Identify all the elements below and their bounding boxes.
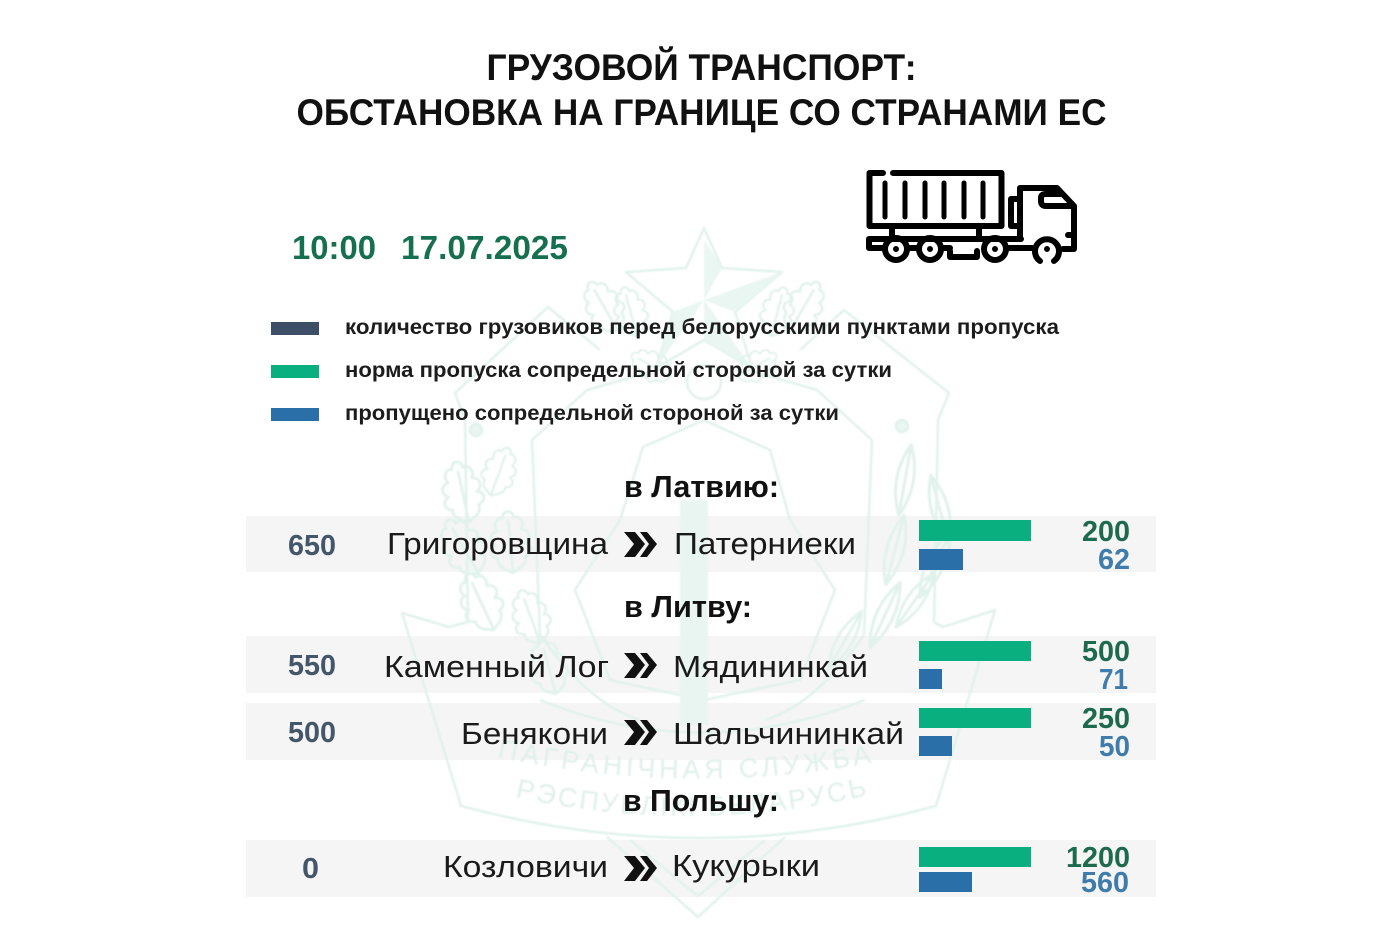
title: ОБСТАНОВКА НА ГРАНИЦЕ СО СТРАНАМИ ЕС <box>296 92 1106 133</box>
row: Grigorovshchina: 650 <box>288 530 336 562</box>
row: Benyakoni: 500 <box>288 717 336 749</box>
heading: Poland: в Польшу: <box>623 783 779 818</box>
watermark: border service emblem <box>400 226 996 918</box>
date and time: 17.07.2025 <box>401 229 568 266</box>
row: Kamenny Log: 550 <box>288 650 336 682</box>
title: ГРУЗОВОЙ ТРАНСПОРТ: <box>486 46 916 88</box>
watermark: border service emblem: РЭСПУБЛІКІ БЕЛАРУСЬ <box>517 779 866 816</box>
date and time <box>292 229 568 266</box>
legend item: daily norm: норма пропуска сопредельной стороной за сутки <box>345 359 892 382</box>
row: Benyakoni: 250 <box>1082 703 1130 735</box>
shield outline <box>402 307 995 838</box>
row: Benyakoni: 50 <box>1099 731 1130 763</box>
row: Grigorovshchina: 62 <box>1098 544 1130 576</box>
row: Kozlovichi: 560 <box>1081 867 1129 899</box>
row: Benyakoni <box>288 703 1130 763</box>
row: Kamenny Log: Мядининкай <box>673 649 868 684</box>
heading: Latvia: в Латвию: <box>624 469 779 504</box>
legend item: passed per day: пропущено сопредельной стороной за сутки <box>345 402 839 425</box>
row: Kozlovichi: Козловичи <box>443 849 608 884</box>
heading: Lithuania: в Литву: <box>624 589 752 624</box>
row: Kozlovichi: Кукурыки <box>672 848 820 883</box>
row: Grigorovshchina: Григоровщина <box>387 526 609 561</box>
row: Kozlovichi: 0 <box>302 853 319 885</box>
title <box>296 46 1106 133</box>
row: Kozlovichi <box>302 842 1130 899</box>
icon: truck <box>869 173 1074 261</box>
legend <box>271 316 1059 425</box>
row: Benyakoni: Шальчининкай <box>673 716 904 751</box>
row: Grigorovshchina: Патерниеки <box>674 526 856 561</box>
date and time: 10:00 <box>292 229 376 266</box>
legend item: trucks in queue: количество грузовиков перед белорусскими пунктами пропуска <box>345 316 1059 339</box>
row: Grigorovshchina <box>288 516 1130 576</box>
row: Kamenny Log <box>288 636 1130 696</box>
row backgrounds <box>246 516 1156 897</box>
row: Kozlovichi: 1200 <box>1066 842 1130 874</box>
row: Grigorovshchina: 200 <box>1082 516 1130 548</box>
watermark: border service emblem: ПАГРАНІЧНАЯ СЛУЖБА <box>499 740 872 779</box>
row: Kamenny Log: 500 <box>1082 636 1130 668</box>
row: Kamenny Log: Каменный Лог <box>384 649 609 684</box>
row: Kamenny Log: 71 <box>1099 664 1128 696</box>
row: Benyakoni: Бенякони <box>461 716 608 751</box>
